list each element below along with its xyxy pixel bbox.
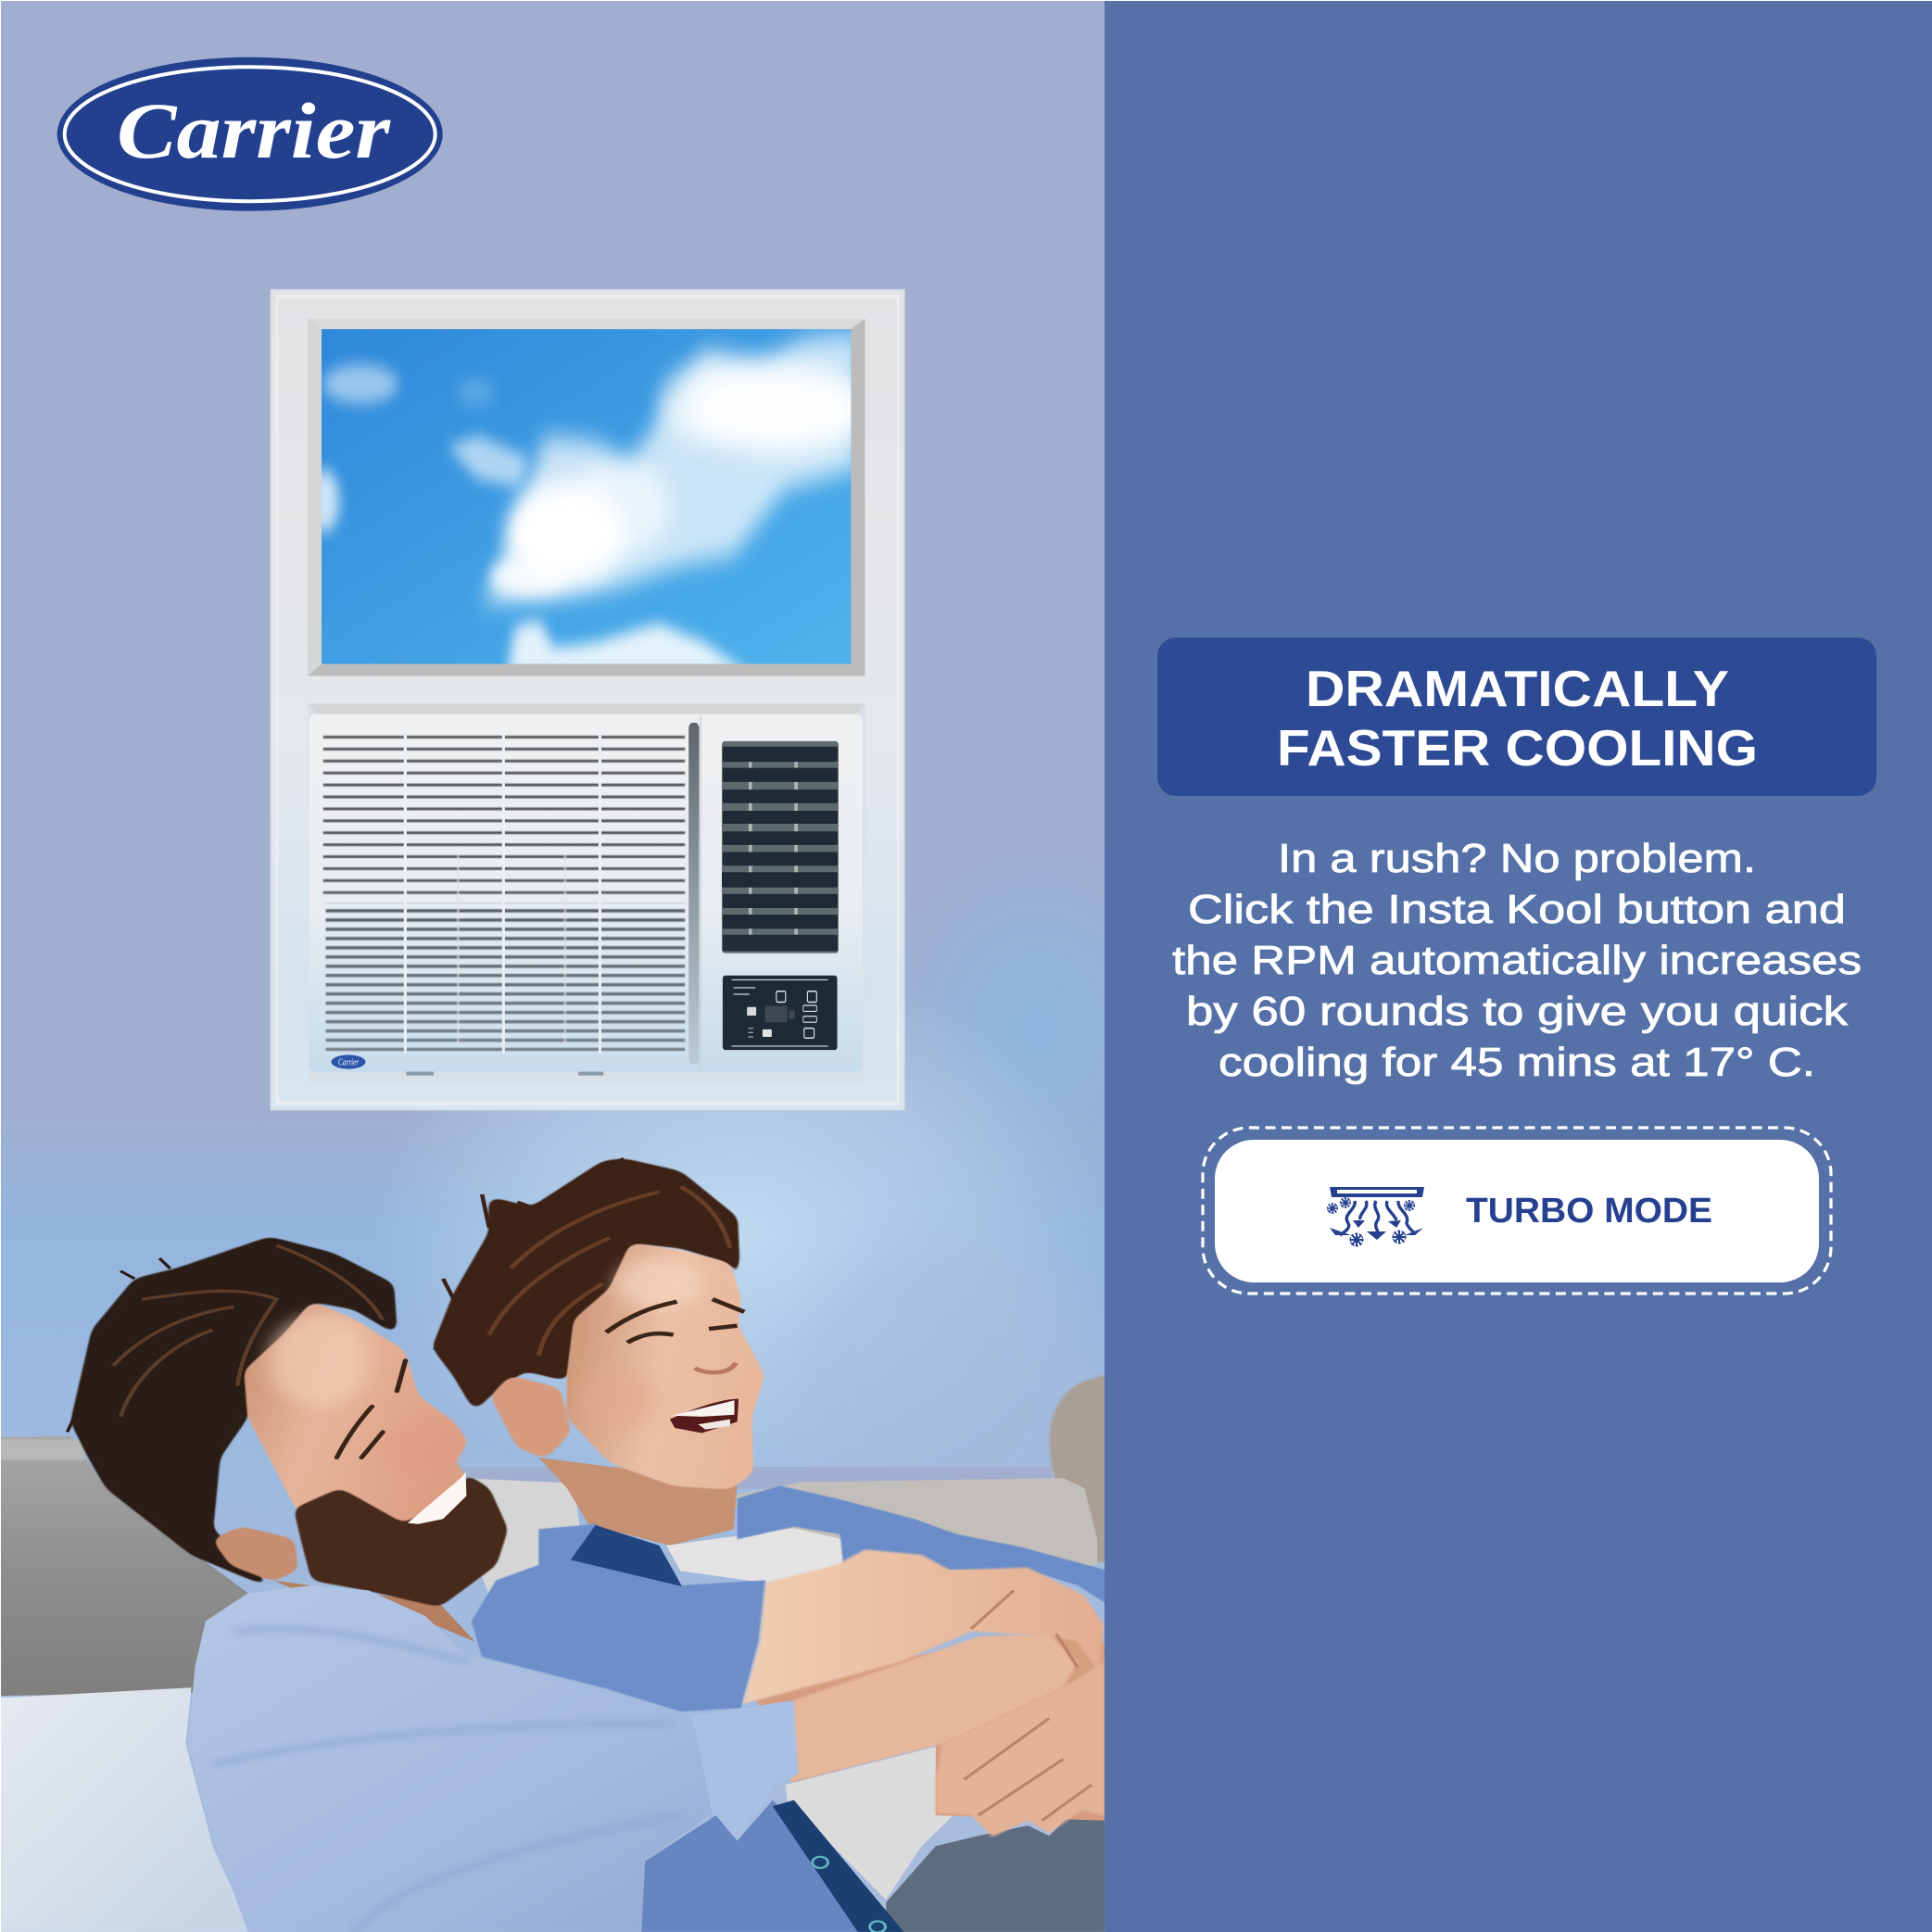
intake grille (323, 727, 686, 1055)
body text: Click the Insta Kool button and (1188, 887, 1846, 932)
sofa and cushions (0, 1375, 1105, 1932)
control panel (723, 976, 838, 1050)
photo: father and son on sofa (0, 1158, 1105, 1932)
mini logo on unit: Carrier (338, 1058, 359, 1067)
heading text (1277, 660, 1758, 777)
logo: Carrier oval: Carrier (117, 86, 392, 175)
man beard (294, 1473, 508, 1607)
boy hair (433, 1158, 740, 1411)
heading text: DRAMATICALLY (1306, 660, 1729, 717)
label: turbo mode: TURBO MODE (1466, 1192, 1712, 1231)
boy ear (490, 1376, 571, 1458)
boy shirt sleeve (472, 1524, 765, 1711)
icon: air conditioner with airflow and snowflakes (1327, 1187, 1424, 1247)
body text: In a rush? No problem. (1278, 836, 1756, 881)
man lower hand (936, 1662, 1105, 1837)
navy inner collar (571, 1525, 682, 1586)
air vent louvers (722, 741, 839, 953)
man neck (273, 1580, 475, 1642)
finger lines (964, 1590, 1092, 1821)
t-shirt lower (786, 1741, 957, 1900)
window sky and clouds (309, 329, 868, 675)
man smile (408, 1471, 466, 1524)
man forearm (790, 1634, 1078, 1782)
body text (1172, 836, 1862, 1085)
man ear (213, 1526, 297, 1582)
t-shirt upper (666, 1528, 842, 1583)
boy mouth (670, 1399, 739, 1433)
man hair (68, 1237, 397, 1590)
window frame (271, 290, 904, 1110)
body text: by 60 rounds to give you quick (1186, 989, 1849, 1034)
heading box (1157, 638, 1876, 796)
vertical slot (688, 723, 700, 1064)
boy nose (695, 1363, 736, 1372)
arm skin base (751, 1634, 1105, 1821)
boy shirt collar and shoulder (738, 1485, 1105, 1603)
mini logo on unit (332, 1054, 365, 1069)
heading text: FASTER COOLING (1277, 719, 1758, 777)
ac unit body (309, 714, 863, 1072)
air conditioner in window frame (271, 290, 904, 1110)
body text: cooling for 45 mins at 17° C. (1219, 1040, 1815, 1085)
logo: Carrier oval (57, 57, 443, 211)
callout: turbo mode (1203, 1128, 1831, 1294)
man cuff (691, 1700, 798, 1840)
jeans (886, 1800, 1105, 1932)
shirt placket with buttons (773, 1800, 903, 1932)
boy arm and man hand (743, 1549, 1105, 1704)
man shirt (188, 1585, 798, 1932)
boy shirt lower (641, 1800, 903, 1932)
man shirt folds (213, 1629, 680, 1932)
panel: right blue background (1105, 1, 1932, 1932)
man eye and brow (336, 1360, 406, 1458)
body text: the RPM automatically increases (1172, 938, 1862, 983)
panel: left photo background (1, 1, 1214, 1932)
man face (245, 1302, 468, 1529)
lower recess (308, 703, 865, 1081)
unit feet (406, 1072, 434, 1076)
boy face (567, 1243, 764, 1489)
window recess bevel (308, 319, 865, 676)
boy brows and eyes (606, 1299, 744, 1343)
boy neck (538, 1458, 738, 1546)
